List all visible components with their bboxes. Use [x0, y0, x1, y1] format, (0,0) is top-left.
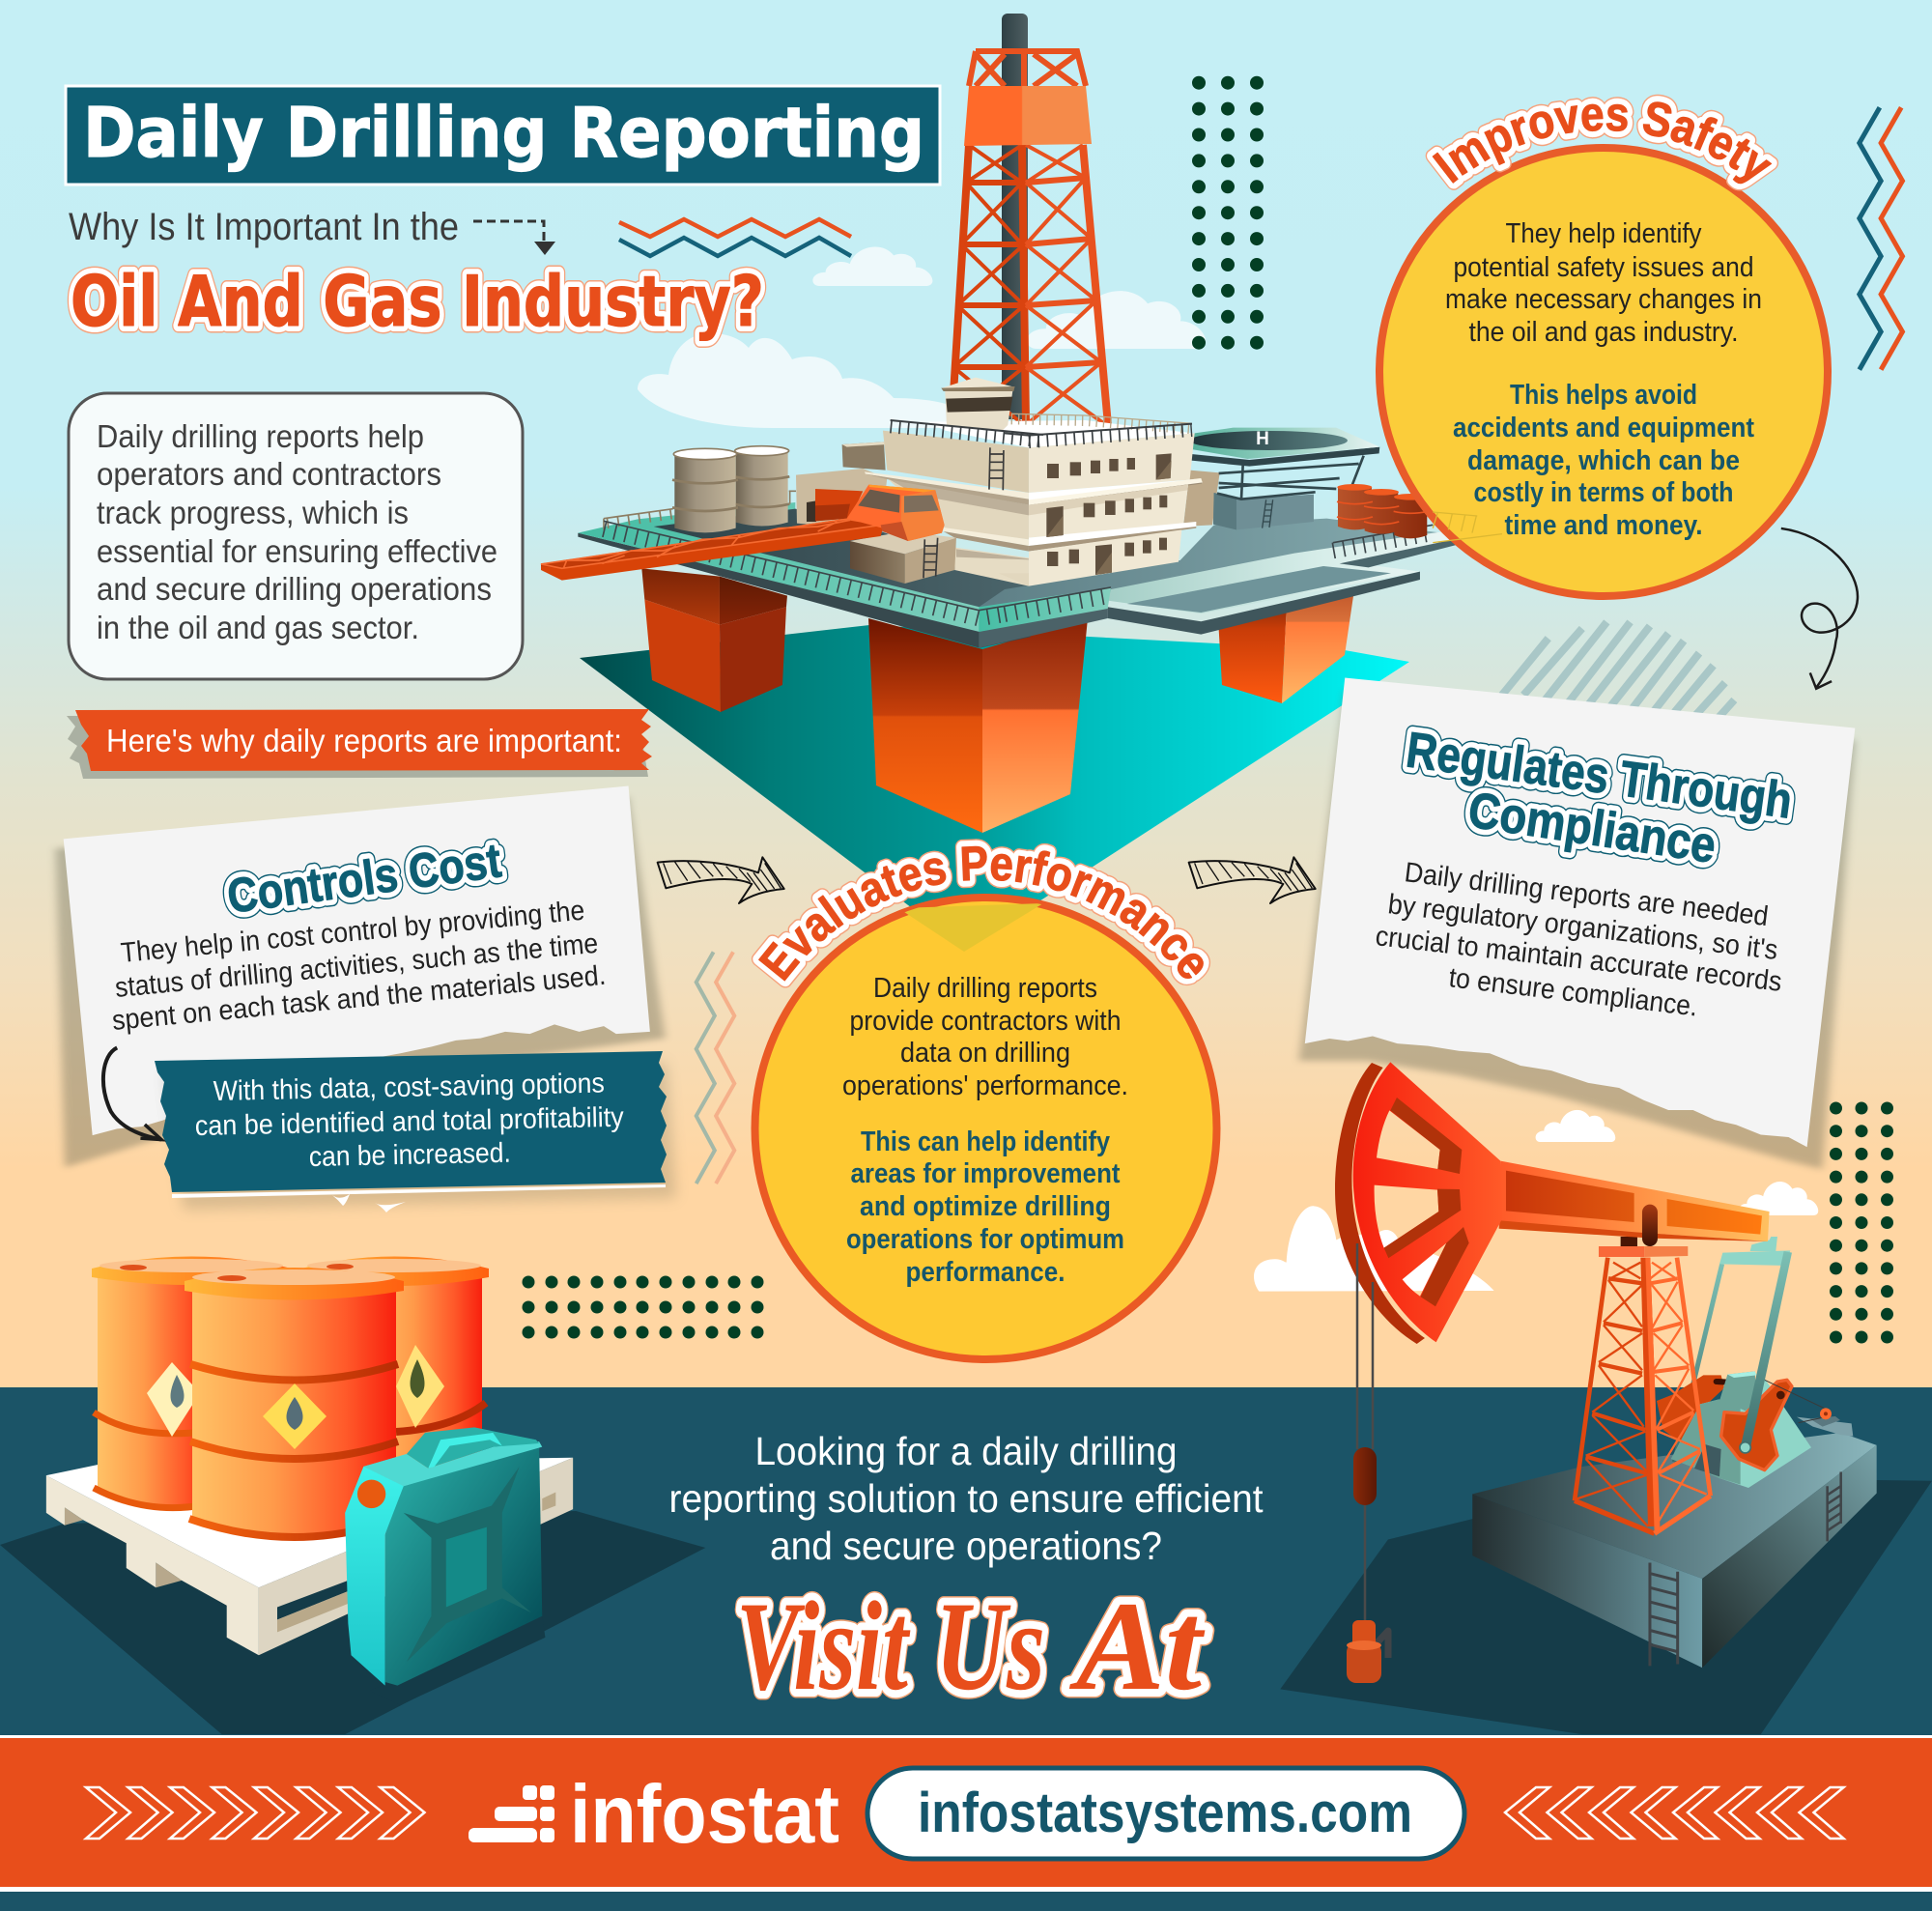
- heading: Controls Cost: Controls Cost: [224, 833, 504, 924]
- icon: right chevrons: [86, 1787, 425, 1839]
- panel: Regulates Through Compliance paper: to ensure compliance.: [1447, 962, 1699, 1023]
- heading: Regulates Through Compliance: [1403, 722, 1796, 874]
- heading: Visit Us At: At: [1069, 1575, 1205, 1717]
- heading: Visit Us At: Us: [935, 1575, 1045, 1717]
- helipad: [1183, 428, 1379, 529]
- heading: Regulates Through Compliance: Compliance: [1464, 783, 1719, 874]
- rig accommodation block right side: [927, 420, 1203, 586]
- heading: Oil And Gas Industry?: Oil And Gas Industry?: [71, 261, 764, 342]
- panel: Evaluates Performance circle: operations' performance.: [842, 1070, 1128, 1101]
- panel: Improves Safety circle: make necessary changes in: [1445, 284, 1762, 315]
- panel: Improves Safety circle: the oil and gas industry.: [1468, 317, 1739, 348]
- panel: Evaluates Performance circle: performance.: [906, 1257, 1065, 1288]
- birds: [332, 1194, 406, 1212]
- panel: intro text box: essential for ensuring effective: [97, 533, 497, 569]
- zigzag decoration middle: [696, 952, 734, 1184]
- faint rail seen through the circle: [1433, 512, 1502, 543]
- rig shadow on the sea: [580, 625, 1409, 949]
- banner: why daily reports are important: [67, 709, 652, 779]
- call to action text: reporting solution to ensure efficient: [668, 1476, 1264, 1521]
- walking beam and horsehead: [1335, 1062, 1770, 1344]
- heading: Evaluates Performance: Evaluates Performance: [752, 839, 1211, 987]
- panel: Controls Cost paper: They help in cost control by providing the: [120, 896, 586, 969]
- zigzag decoration: [619, 219, 851, 256]
- bridge cabin: [941, 378, 1015, 430]
- panel: Evaluates Performance circle: This can help identify: [861, 1127, 1110, 1157]
- front barrel: [185, 1268, 404, 1540]
- paper sheet: [55, 785, 666, 1168]
- pump cable and counterweight: [1347, 1243, 1388, 1683]
- heading: Visit Us At: Visit: [736, 1575, 910, 1717]
- rig shadow tip through circle: [898, 903, 1043, 952]
- panel: Improves Safety circle: They help identify: [1505, 218, 1702, 249]
- panel: Improves Safety circle: accidents and equipment: [1453, 413, 1754, 443]
- panel: intro text box: and secure drilling operations: [97, 571, 492, 607]
- jerry can: [345, 1427, 545, 1705]
- call to action text: [668, 1429, 1264, 1568]
- callout: cost-saving teal note: can be increased.: [308, 1138, 511, 1173]
- panel: Regulates Through Compliance paper: by regulatory organizations, so it's: [1386, 889, 1779, 966]
- footer band: [0, 1735, 1932, 1892]
- panel: Evaluates Performance circle: data on drilling: [900, 1038, 1070, 1069]
- heading: Oil And Gas Industry?: Oil And Gas Industry?: [71, 261, 764, 342]
- website pill: infostatsystems.com: [918, 1782, 1412, 1844]
- bottom band: [0, 1387, 1932, 1911]
- pump crank and counterweight: [1657, 1237, 1853, 1488]
- heading: Evaluates Performance: Evaluates Performance: [753, 841, 1209, 987]
- callout: cost-saving teal note: can be identified and total profitability: [194, 1102, 625, 1142]
- heading: Visit Us At: Us: [935, 1575, 1045, 1717]
- subtitle: Why Is It Important In the: [69, 206, 459, 248]
- arrow: curved black to note: [103, 1047, 161, 1140]
- pump tower: [1575, 1258, 1711, 1533]
- clouds behind pump jack: [1254, 1110, 1818, 1292]
- small barrels on deck: [1337, 484, 1428, 538]
- illustration: barrels on pallet with jerry can: [0, 1256, 705, 1734]
- heading: Oil And Gas Industry?: Oil And Gas Industry?: [71, 261, 764, 342]
- heading: Regulates Through Compliance: Regulates Through: [1403, 722, 1796, 830]
- rig accommodation block left side: [796, 431, 1029, 586]
- panel: Evaluates Performance circle: provide contractors with: [850, 1006, 1121, 1037]
- heading: Evaluates Performance: Evaluates Performance: [758, 846, 1204, 982]
- call to action text: Looking for a daily drilling: [755, 1429, 1177, 1473]
- rig deck left: [578, 491, 1043, 648]
- panel: intro text box: Daily drilling reports help: [97, 418, 424, 454]
- panel: Controls Cost paper: status of drilling activities, such as the time: [114, 928, 600, 1004]
- heading: Regulates Through Compliance: Regulates Through: [1403, 722, 1796, 830]
- title: Daily Drilling Reporting: [83, 93, 924, 173]
- pallet with shadow: [0, 1458, 705, 1734]
- panel: Evaluates Performance circle: areas for improvement: [850, 1158, 1121, 1189]
- banner: why daily reports are important: Here's why daily reports are important:: [106, 723, 622, 758]
- heading: Visit Us At: [736, 1575, 1205, 1717]
- panel: Improves Safety circle: time and money.: [1505, 510, 1702, 541]
- panel: Regulates Through Compliance paper: Daily drilling reports are needed: [1403, 857, 1770, 932]
- dot pattern right: [1830, 1101, 1893, 1343]
- panel: Improves Safety circle: [1376, 95, 1832, 600]
- panel: Evaluates Performance circle: operations for optimum: [846, 1224, 1124, 1255]
- heading: Controls Cost: Controls Cost: [224, 833, 504, 924]
- panel: intro text box: in the oil and gas sector.: [97, 610, 419, 645]
- deck railings: [604, 521, 1433, 618]
- panel: Improves Safety circle: costly in terms of both: [1474, 477, 1733, 508]
- logo: infostat: infostat: [570, 1769, 839, 1861]
- callout: cost-saving teal note: [155, 1051, 676, 1210]
- heading: Visit Us At: At: [1069, 1575, 1205, 1717]
- illustration: oil pump jack: [1280, 1062, 1932, 1734]
- panel: Regulates Through Compliance paper: [1298, 678, 1855, 1169]
- panel: Evaluates Performance circle: and optimize drilling: [860, 1191, 1111, 1222]
- clouds in the sky: [638, 246, 1206, 428]
- helipad marker: H: [1256, 429, 1269, 449]
- back left barrel: [92, 1256, 292, 1508]
- pump base block: [1472, 1433, 1877, 1668]
- rig deck right and extension: [979, 519, 1471, 648]
- panel: Evaluates Performance circle: [752, 839, 1221, 1363]
- panel: Improves Safety circle: damage, which can be: [1467, 445, 1740, 476]
- panel: Evaluates Performance circle: Daily drilling reports: [873, 973, 1097, 1004]
- call to action text: and secure operations?: [770, 1524, 1162, 1568]
- heading: Visit Us At: Visit: [736, 1575, 910, 1717]
- arrow: looped arrow to compliance: [1781, 528, 1858, 689]
- striped half circle decoration: [1502, 622, 1734, 717]
- back right barrel: [301, 1256, 489, 1478]
- dot pattern top: [1192, 76, 1264, 350]
- icon: left chevrons: [1505, 1787, 1843, 1839]
- heading: Regulates Through Compliance: Regulates Through: [1403, 722, 1796, 830]
- panel: Regulates Through Compliance paper: crucial to maintain accurate records: [1374, 921, 1783, 998]
- paper sheet: [1298, 678, 1855, 1169]
- heading: Regulates Through Compliance: Compliance: [1464, 783, 1719, 874]
- callout: cost-saving teal note: With this data, cost-saving options: [213, 1069, 605, 1107]
- arrow: hatched to Regulates: [1189, 857, 1316, 903]
- drilling tower: [952, 14, 1108, 425]
- heading: Visit Us At: Visit: [736, 1575, 910, 1717]
- heading: Improves Safety: Improves Safety: [1426, 95, 1779, 191]
- background sky: [0, 0, 1932, 1391]
- heading: Improves Safety: Improves Safety: [1427, 96, 1777, 189]
- dot pattern bottom: [522, 1275, 763, 1339]
- panel: intro text box: track progress, which is: [97, 495, 409, 530]
- heading: Improves Safety: Improves Safety: [1432, 101, 1772, 184]
- panel: intro text box: [69, 393, 523, 679]
- heading: Regulates Through Compliance: Compliance: [1464, 783, 1719, 874]
- arrow: hatched to Evaluates Performance: [658, 857, 784, 903]
- icon: dashed arrow: [473, 221, 555, 255]
- panel: intro text box: operators and contractors: [97, 456, 441, 492]
- panel: Controls Cost paper: [55, 785, 666, 1168]
- illustration: offshore oil rig: [541, 14, 1471, 833]
- heading: Controls Cost: Controls Cost: [224, 833, 504, 924]
- storage tanks: [672, 446, 789, 532]
- rig columns: [641, 568, 1354, 833]
- website pill: [867, 1768, 1464, 1859]
- heading: Visit Us At: At: [1069, 1575, 1205, 1717]
- pump base shadow: [1280, 1477, 1932, 1734]
- panel: Controls Cost paper: spent on each task and the materials used.: [111, 960, 607, 1037]
- zigzag decoration right: [1860, 107, 1902, 370]
- roof railings: [891, 414, 1192, 442]
- heading: Visit Us At: Us: [935, 1575, 1045, 1717]
- panel: Improves Safety circle: potential safety issues and: [1453, 252, 1754, 283]
- logo: infostat: [469, 1769, 839, 1861]
- panel: Improves Safety circle: This helps avoid: [1510, 380, 1697, 411]
- crane: [541, 485, 945, 581]
